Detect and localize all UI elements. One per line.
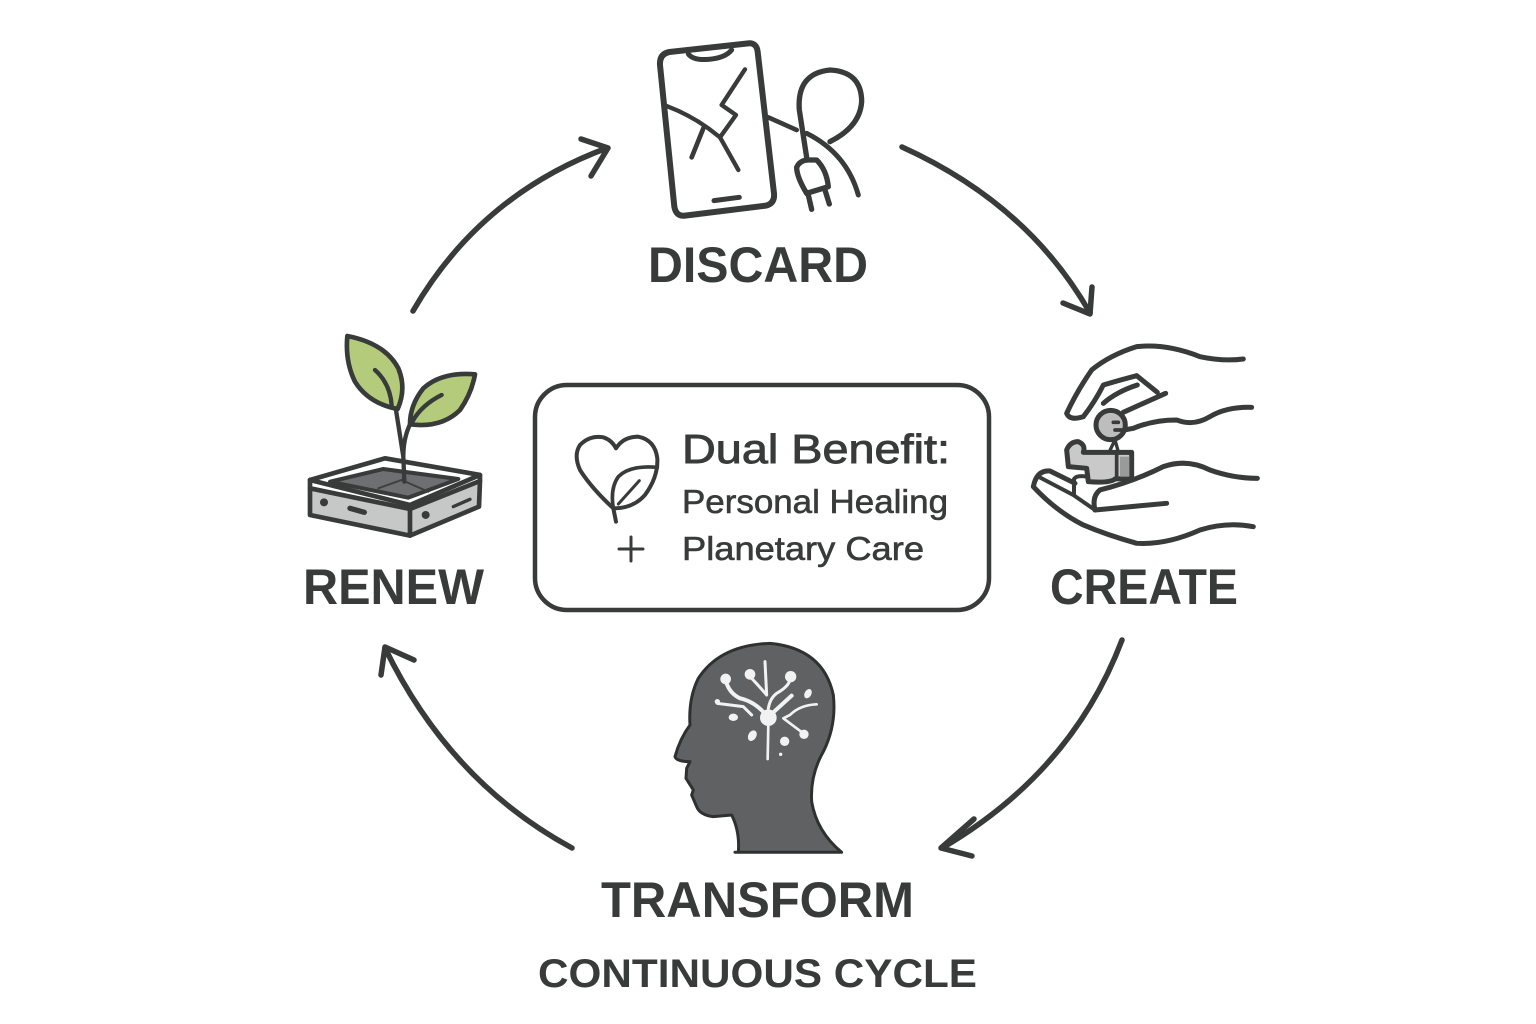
label: transform: TRANSFORM [601, 872, 914, 928]
icon: heart with leaf [577, 437, 657, 522]
heading: dual benefit: Dual Benefit: [682, 426, 950, 472]
arrow: renew to discard [413, 139, 608, 311]
label: create: CREATE [1050, 559, 1238, 615]
arrow: transform to renew [381, 647, 572, 848]
icon: cracked phone with plug [660, 43, 862, 216]
icon: head with neuron [675, 643, 842, 852]
icon: sprout growing from device [310, 336, 480, 536]
panel: dual benefit [535, 385, 989, 610]
label: discard: DISCARD [648, 237, 868, 293]
label: renew: RENEW [303, 559, 485, 615]
icon: plus sign [619, 537, 643, 561]
arrow: create to transform [941, 640, 1122, 856]
text: planetary care: Planetary Care [682, 530, 924, 567]
arrow: discard to create [902, 147, 1092, 314]
caption: continuous cycle: CONTINUOUS CYCLE [538, 952, 977, 996]
icon: hands holding puzzle piece [1033, 346, 1257, 543]
text: personal healing: Personal Healing [682, 483, 948, 520]
